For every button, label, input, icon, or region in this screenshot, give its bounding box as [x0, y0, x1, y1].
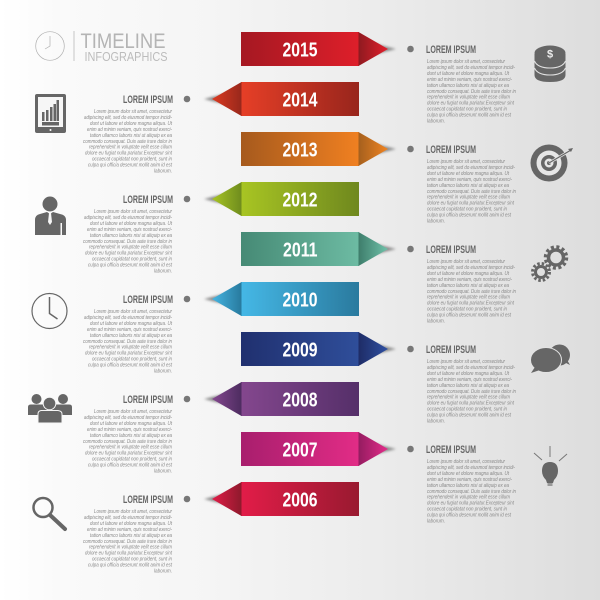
entry: left 2012: Lorem ipsum dolor sit amet, consectetur — [94, 209, 172, 215]
entry: left 2010: LOREM IPSUM — [123, 294, 173, 306]
entry: right 2009: LOREM IPSUM — [426, 344, 476, 356]
entry: left 2010: culpa qui officia deserunt mollit anim id est — [88, 362, 172, 368]
entry: left 2008: adipiscing elit, sed do eiusmod tempor incidi- — [84, 415, 172, 421]
entry: left 2008: culpa qui officia deserunt mollit anim id est — [88, 462, 172, 468]
entry: right 2015: adipiscing elit, sed do eiusmod tempor incidi- — [427, 65, 515, 71]
entry: left 2008: enim ad minim veniam, quis nostrud exerci- — [87, 427, 172, 433]
entry: left 2014 — [83, 94, 190, 174]
entry: left 2010: Lorem ipsum dolor sit amet, consectetur — [94, 309, 172, 315]
entry: right 2011: reprehenderit in voluptate velit esse cillum — [427, 294, 510, 300]
entry: right 2007: laborum. — [427, 518, 445, 524]
entry: left 2006: occaecat cupidatat non proident, sunt in — [92, 556, 172, 562]
entry: right 2007: adipiscing elit, sed do eiusmod tempor incidi- — [427, 465, 515, 471]
entry: right 2009 — [407, 344, 516, 424]
icon: target — [530, 144, 573, 182]
entry: right 2015: occaecat cupidatat non proident, sunt in — [427, 106, 507, 112]
ribbon 2012 — [204, 182, 359, 216]
entry: left 2010: commodo consequat. Duis aute irure dolor in — [83, 339, 172, 345]
icon: title clock — [36, 32, 64, 60]
entry: right 2007: dolore eu fugiat nulla pariatur.Excepteur sint — [427, 500, 514, 506]
ribbon 2009: 2009 — [282, 340, 318, 362]
ribbon 2010 — [204, 282, 359, 316]
ribbon 2011: 2011 — [283, 240, 318, 262]
entry: left 2014: tation ullamco laboris nisi ut aliquip ex ea — [90, 133, 172, 139]
entry: left 2008: commodo consequat. Duis aute irure dolor in — [83, 439, 172, 445]
entry: right 2009: enim ad minim veniam, quis nostrud exerci- — [427, 377, 512, 383]
entry: left 2008: dunt ut labore et dolore magna aliqua. Ut — [90, 421, 172, 427]
ribbon 2006: 2006 — [282, 490, 318, 512]
entry: left 2006: laborum. — [154, 568, 172, 574]
entry: left 2012 — [83, 194, 190, 274]
entry: left 2006: adipiscing elit, sed do eiusmod tempor incidi- — [84, 515, 172, 521]
entry: left 2008 — [83, 394, 190, 474]
entry: left 2012: laborum. — [154, 268, 172, 274]
icon: businessman — [35, 196, 66, 235]
entry: left 2010: enim ad minim veniam, quis nostrud exerci- — [87, 327, 172, 333]
ribbon 2013: 2013 — [282, 140, 318, 162]
entry: right 2013: dunt ut labore et dolore magna aliqua. Ut — [427, 171, 509, 177]
entry: left 2012: reprehenderit in voluptate velit esse cillum — [89, 244, 172, 250]
ribbon 2011 — [241, 232, 396, 266]
entry: right 2015: dolore eu fugiat nulla pariatur.Excepteur sint — [427, 100, 514, 106]
entry: right 2015: LOREM IPSUM — [426, 44, 476, 56]
entry: left 2006: LOREM IPSUM — [123, 494, 173, 506]
entry: right 2013: LOREM IPSUM — [426, 144, 476, 156]
entry: left 2014: reprehenderit in voluptate velit esse cillum — [89, 144, 172, 150]
entry: right 2009: tation ullamco laboris nisi ut aliquip ex ea — [427, 383, 509, 389]
ribbon 2008 — [204, 382, 359, 416]
ribbon 2008: 2008 — [282, 390, 318, 412]
entry: left 2006: enim ad minim veniam, quis nostrud exerci- — [87, 527, 172, 533]
icon: team — [28, 394, 72, 423]
ribbon 2012: 2012 — [282, 190, 318, 212]
entry: left 2014: enim ad minim veniam, quis nostrud exerci- — [87, 127, 172, 133]
ribbon 2015: 2015 — [282, 40, 318, 62]
entry: right 2009: adipiscing elit, sed do eiusmod tempor incidi- — [427, 365, 515, 371]
entry: left 2010: reprehenderit in voluptate velit esse cillum — [89, 344, 172, 350]
entry: left 2012: adipiscing elit, sed do eiusmod tempor incidi- — [84, 215, 172, 221]
entry: left 2008: Lorem ipsum dolor sit amet, consectetur — [94, 409, 172, 415]
title text: TIMELINE — [80, 30, 166, 53]
entry: right 2007: reprehenderit in voluptate velit esse cillum — [427, 494, 510, 500]
ribbon 2007 — [241, 432, 396, 466]
icon: coins: $ — [547, 48, 553, 60]
entry: right 2009: reprehenderit in voluptate velit esse cillum — [427, 394, 510, 400]
entry: right 2013 — [407, 144, 516, 224]
entry: left 2008: reprehenderit in voluptate velit esse cillum — [89, 444, 172, 450]
entry: right 2007: dunt ut labore et dolore magna aliqua. Ut — [427, 471, 509, 477]
entry: left 2012: commodo consequat. Duis aute irure dolor in — [83, 239, 172, 245]
entry: right 2011: LOREM IPSUM — [426, 244, 476, 256]
ribbon 2013 — [241, 132, 396, 166]
entry: left 2014: culpa qui officia deserunt mollit anim id est — [88, 162, 172, 168]
entry: left 2012: occaecat cupidatat non proident, sunt in — [92, 256, 172, 262]
entry: left 2014: commodo consequat. Duis aute irure dolor in — [83, 139, 172, 145]
ribbon 2006 — [204, 482, 359, 516]
entry: left 2014: laborum. — [154, 168, 172, 174]
entry: left 2014: occaecat cupidatat non proident, sunt in — [92, 156, 172, 162]
entry: left 2012: dolore eu fugiat nulla pariatur.Excepteur sint — [85, 250, 172, 256]
entry: right 2011 — [407, 244, 516, 324]
entry: left 2006 — [83, 494, 190, 574]
entry: left 2006: dolore eu fugiat nulla pariatur.Excepteur sint — [85, 550, 172, 556]
entry: right 2007: enim ad minim veniam, quis nostrud exerci- — [427, 477, 512, 483]
icon: coins — [534, 46, 566, 82]
entry: right 2013: enim ad minim veniam, quis nostrud exerci- — [427, 177, 512, 183]
title block: INFOGRAPHICS — [84, 50, 168, 64]
entry: left 2014: LOREM IPSUM — [123, 94, 173, 106]
entry: right 2011: Lorem ipsum dolor sit amet, consectetur — [427, 259, 505, 265]
icon: light bulb — [534, 446, 567, 486]
entry: left 2012: dunt ut labore et dolore magna aliqua. Ut — [90, 221, 172, 227]
entry: right 2015: enim ad minim veniam, quis nostrud exerci- — [427, 77, 512, 83]
entry: left 2010: dunt ut labore et dolore magna aliqua. Ut — [90, 321, 172, 327]
entry: right 2015: commodo consequat. Duis aute irure dolor in — [427, 89, 516, 95]
ribbon 2014 — [204, 82, 359, 116]
entry: right 2007: LOREM IPSUM — [426, 444, 476, 456]
entry: left 2008: laborum. — [154, 468, 172, 474]
icon: gears — [532, 247, 566, 280]
entry: right 2007: tation ullamco laboris nisi ut aliquip ex ea — [427, 483, 509, 489]
entry: left 2012: tation ullamco laboris nisi ut aliquip ex ea — [90, 233, 172, 239]
entry: right 2015: laborum. — [427, 118, 445, 124]
ribbon 2007: 2007 — [282, 440, 318, 462]
ribbon 2009 — [241, 332, 396, 366]
entry: left 2008: LOREM IPSUM — [123, 394, 173, 406]
entry: right 2015: tation ullamco laboris nisi ut aliquip ex ea — [427, 83, 509, 89]
entry: right 2013: laborum. — [427, 218, 445, 224]
entry: left 2014: dolore eu fugiat nulla pariatur.Excepteur sint — [85, 150, 172, 156]
entry: right 2007: Lorem ipsum dolor sit amet, consectetur — [427, 459, 505, 465]
entry: right 2013: tation ullamco laboris nisi ut aliquip ex ea — [427, 183, 509, 189]
entry: left 2014: Lorem ipsum dolor sit amet, consectetur — [94, 109, 172, 115]
ribbon 2015 — [241, 32, 396, 66]
entry: right 2007: occaecat cupidatat non proident, sunt in — [427, 506, 507, 512]
entry: right 2015: culpa qui officia deserunt mollit anim id est — [427, 112, 511, 118]
entry: right 2013: dolore eu fugiat nulla pariatur.Excepteur sint — [427, 200, 514, 206]
entry: left 2012: culpa qui officia deserunt mollit anim id est — [88, 262, 172, 268]
ribbon 2010: 2010 — [282, 290, 318, 312]
entry: left 2010: occaecat cupidatat non proident, sunt in — [92, 356, 172, 362]
entry: right 2013: adipiscing elit, sed do eiusmod tempor incidi- — [427, 165, 515, 171]
icon: tablet chart — [35, 94, 66, 133]
entry: right 2013: culpa qui officia deserunt mollit anim id est — [427, 212, 511, 218]
entry: right 2007: commodo consequat. Duis aute irure dolor in — [427, 489, 516, 495]
entry: right 2015 — [407, 44, 516, 124]
title block — [36, 30, 168, 64]
entry: right 2009: commodo consequat. Duis aute irure dolor in — [427, 389, 516, 395]
entry: right 2015: Lorem ipsum dolor sit amet, consectetur — [427, 59, 505, 65]
entry: left 2006: dunt ut labore et dolore magna aliqua. Ut — [90, 521, 172, 527]
entry: right 2009: Lorem ipsum dolor sit amet, consectetur — [427, 359, 505, 365]
entry: right 2009: laborum. — [427, 418, 445, 424]
icon: clock — [32, 294, 67, 328]
entry: right 2011: dunt ut labore et dolore magna aliqua. Ut — [427, 271, 509, 277]
entry: left 2008: tation ullamco laboris nisi ut aliquip ex ea — [90, 433, 172, 439]
entry: right 2011: tation ullamco laboris nisi ut aliquip ex ea — [427, 283, 509, 289]
entry: left 2008: occaecat cupidatat non proident, sunt in — [92, 456, 172, 462]
entry: left 2008: dolore eu fugiat nulla pariatur.Excepteur sint — [85, 450, 172, 456]
entry: left 2006: reprehenderit in voluptate velit esse cillum — [89, 544, 172, 550]
ribbon 2014: 2014 — [282, 90, 318, 112]
entry: left 2010 — [83, 294, 190, 374]
entry: right 2013: occaecat cupidatat non proident, sunt in — [427, 206, 507, 212]
entry: left 2006: tation ullamco laboris nisi ut aliquip ex ea — [90, 533, 172, 539]
entry: right 2015: dunt ut labore et dolore magna aliqua. Ut — [427, 71, 509, 77]
entry: right 2011: dolore eu fugiat nulla pariatur.Excepteur sint — [427, 300, 514, 306]
entry: left 2014: adipiscing elit, sed do eiusmod tempor incidi- — [84, 115, 172, 121]
entry: right 2007: culpa qui officia deserunt mollit anim id est — [427, 512, 511, 518]
entry: right 2013: reprehenderit in voluptate velit esse cillum — [427, 194, 510, 200]
entry: right 2007 — [407, 444, 516, 524]
entry: right 2009: occaecat cupidatat non proident, sunt in — [427, 406, 507, 412]
entry: left 2006: Lorem ipsum dolor sit amet, consectetur — [94, 509, 172, 515]
entry: right 2011: laborum. — [427, 318, 445, 324]
entry: left 2010: laborum. — [154, 368, 172, 374]
entry: left 2010: dolore eu fugiat nulla pariatur.Excepteur sint — [85, 350, 172, 356]
entry: right 2013: Lorem ipsum dolor sit amet, consectetur — [427, 159, 505, 165]
entry: left 2010: adipiscing elit, sed do eiusmod tempor incidi- — [84, 315, 172, 321]
entry: right 2011: culpa qui officia deserunt mollit anim id est — [427, 312, 511, 318]
entry: left 2006: culpa qui officia deserunt mollit anim id est — [88, 562, 172, 568]
icon: speech bubbles — [530, 344, 570, 373]
entry: left 2006: commodo consequat. Duis aute irure dolor in — [83, 539, 172, 545]
icon: magnifier — [34, 498, 65, 529]
entry: left 2014: dunt ut labore et dolore magna aliqua. Ut — [90, 121, 172, 127]
entry: left 2012: LOREM IPSUM — [123, 194, 173, 206]
entry: right 2011: adipiscing elit, sed do eiusmod tempor incidi- — [427, 265, 515, 271]
entry: right 2011: commodo consequat. Duis aute irure dolor in — [427, 289, 516, 295]
entry: right 2013: commodo consequat. Duis aute irure dolor in — [427, 189, 516, 195]
entry: left 2010: tation ullamco laboris nisi ut aliquip ex ea — [90, 333, 172, 339]
entry: right 2011: enim ad minim veniam, quis nostrud exerci- — [427, 277, 512, 283]
entry: right 2009: dolore eu fugiat nulla pariatur.Excepteur sint — [427, 400, 514, 406]
entry: left 2012: enim ad minim veniam, quis nostrud exerci- — [87, 227, 172, 233]
entry: right 2015: reprehenderit in voluptate velit esse cillum — [427, 94, 510, 100]
entry: right 2011: occaecat cupidatat non proident, sunt in — [427, 306, 507, 312]
entry: right 2009: culpa qui officia deserunt mollit anim id est — [427, 412, 511, 418]
entry: right 2009: dunt ut labore et dolore magna aliqua. Ut — [427, 371, 509, 377]
